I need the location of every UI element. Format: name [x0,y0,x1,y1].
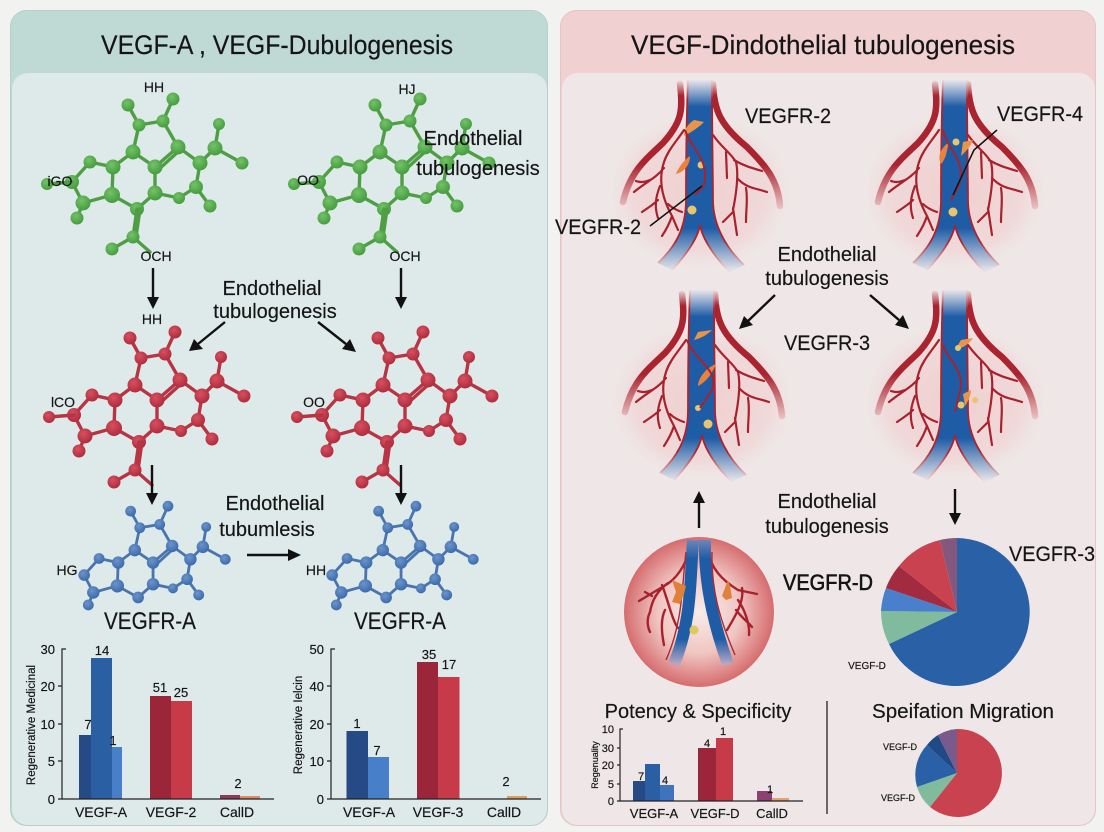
label: endothelial tubumlesis: Endothelial [226,493,324,515]
label: endothelial tubulogenesis lower: tubulogenesis [765,516,889,538]
bar chart: regenerative medicinal: VEGF-A [75,804,128,820]
bar chart: regenerative ielcin: 7 [373,743,381,758]
bar chart: regenerative medicinal: 0 [48,792,55,807]
bar chart: regenerative ielcin [293,642,541,820]
molecule labels: iGO [48,173,73,189]
bar chart: potency: 0 [608,796,614,808]
bar chart: regenerative ielcin: Regenerative Ielcin [293,676,305,774]
bar chart: regenerative medicinal: 51 [153,680,167,695]
label: VEGFR-A right: VEGFR-A [354,608,446,635]
label: endothelial tubumlesis [219,493,324,541]
molecule: blue left [78,501,231,610]
vessel: middle left [604,290,800,486]
label: VEGF-D small pie lower: VEGF-D [881,793,915,803]
bar chart: regenerative medicinal: CallD [220,804,254,820]
heading: Potency and Specificity: Potency & Specificity [605,701,791,723]
panel: left molecular structures [10,10,548,826]
bar chart: potency: 10 [602,724,614,736]
bar chart: regenerative medicinal: 14 [95,643,109,658]
molecule: red right [291,326,498,488]
pie chart: small [915,729,1002,817]
arrows: left panel [146,268,407,561]
bar chart: regenerative ielcin: 2 [502,774,510,789]
bar chart: regenerative ielcin: 1 [353,716,361,731]
bar chart: potency: 1 [767,784,773,796]
vessel: top left [602,80,798,276]
title: right panel: VEGF-Dindothelial tubulogenesis [631,30,1015,60]
bar chart: regenerative medicinal: 1 [109,733,117,748]
label: endothelial tubulogenesis lower: Endothelial [778,491,876,513]
molecule: green left [41,92,248,256]
label: endothelial tubulogenesis: Endothelial [778,244,876,266]
bar chart: regenerative medicinal: 25 [174,685,188,700]
bar chart: potency: VEGF-A [630,806,679,821]
bar chart: regenerative ielcin: 0 [317,792,324,807]
molecule labels: OCH [389,248,421,264]
molecule: blue right [326,501,479,610]
bar chart: potency: 7 [638,771,644,783]
bar chart: potency: 20 [602,760,614,772]
vessel: top right [857,80,1053,276]
bar chart: potency [590,724,803,821]
bar chart: regenerative medicinal: Regenerative Medicinal [26,665,38,785]
label: VEGFR-2 callout: VEGFR-2 [555,215,641,239]
label: VEGFR-A left: VEGFR-A [104,608,196,635]
arrows: right panel [693,295,961,528]
label: endothelial tubulogenesis top right: tubulogenesis [416,158,540,180]
bar chart: regenerative ielcin: 17 [442,657,456,672]
molecule labels: HJ [398,81,416,97]
bar chart: regenerative medicinal: 10 [41,717,55,732]
bar chart: regenerative ielcin: CallD [487,804,521,820]
pie chart: large [881,538,1030,686]
bar chart: regenerative medicinal [26,642,274,820]
divider [826,701,828,814]
label: endothelial tubulogenesis middle: Endothelial [223,278,321,300]
molecule labels: OCH [140,248,172,264]
label: VEGFR-3 pie: VEGFR-3 [1009,542,1095,566]
bar chart: potency: 30 [602,743,614,755]
bar chart: regenerative ielcin: 50 [310,642,324,657]
bar chart: regenerative medicinal: 7 [84,717,92,732]
label: VEGFR-2 callout [555,186,702,239]
bar chart: potency: 4 [662,775,668,787]
icon: vessel cross-section disc [624,537,774,687]
molecule: red left [43,326,250,488]
bar chart: regenerative ielcin: 35 [422,647,436,662]
bar chart: regenerative medicinal: 30 [41,642,55,657]
bar chart: regenerative medicinal: 5 [48,754,55,769]
label: endothelial tubulogenesis [765,244,889,290]
label: VEGFR-3 center: VEGFR-3 [784,331,870,355]
molecule labels: HH [306,562,326,578]
label: VEGFR-2: VEGFR-2 [745,104,831,128]
label: endothelial tubulogenesis top right: Endothelial [424,128,522,150]
bar chart: potency: CallD [756,806,788,821]
label: endothelial tubulogenesis: tubulogenesis [765,268,889,290]
molecule: green right [288,92,496,256]
label: VEGFR-4: VEGFR-4 [997,102,1083,126]
bar chart: regenerative ielcin: 20 [310,717,324,732]
label: VEGF-D small pie upper: VEGF-D [883,742,917,752]
bar chart: regenerative ielcin: 40 [310,679,324,694]
bar chart: potency: 4 [704,738,710,750]
bar chart: regenerative medicinal: 20 [41,679,55,694]
label: endothelial tubulogenesis middle [213,278,337,323]
label: endothelial tubulogenesis middle: tubulogenesis [213,301,337,323]
label: VEGF-D large pie: VEGF-D [848,661,886,672]
molecule labels: HG [56,562,78,578]
molecule labels: HH [142,311,162,327]
molecule labels: OO [303,394,325,410]
bar chart: potency: Regenuality [590,741,600,789]
label: VEGFR-D: VEGFR-D [783,570,873,595]
callout line: VEGFR-4 [953,130,997,195]
bar chart: regenerative ielcin: VEGF-3 [413,804,463,820]
bar chart: potency: VEGF-D [690,806,740,821]
molecule labels: HH [144,79,164,95]
molecule labels [48,79,421,578]
bar chart: regenerative medicinal: 2 [234,776,242,791]
panel: right vascular diagrams [555,10,1096,826]
label: endothelial tubulogenesis top right [416,128,540,180]
bar chart: potency: 5 [608,779,614,791]
heading: Speifation Migration: Speifation Migration [872,701,1054,723]
label: endothelial tubulogenesis lower [765,491,889,538]
bar chart: regenerative ielcin: VEGF-A [343,804,396,820]
title: left panel: VEGF-A , VEGF-Dubulogenesis [101,30,453,60]
vessel: middle right [857,290,1053,486]
bar chart: regenerative medicinal: VEGF-2 [146,804,196,820]
bar chart: potency: 1 [720,726,726,738]
bar chart: regenerative ielcin: 10 [310,754,324,769]
label: endothelial tubumlesis: tubumlesis [219,519,315,541]
molecule labels: lCO [51,394,75,410]
molecule labels: OO [297,172,319,188]
